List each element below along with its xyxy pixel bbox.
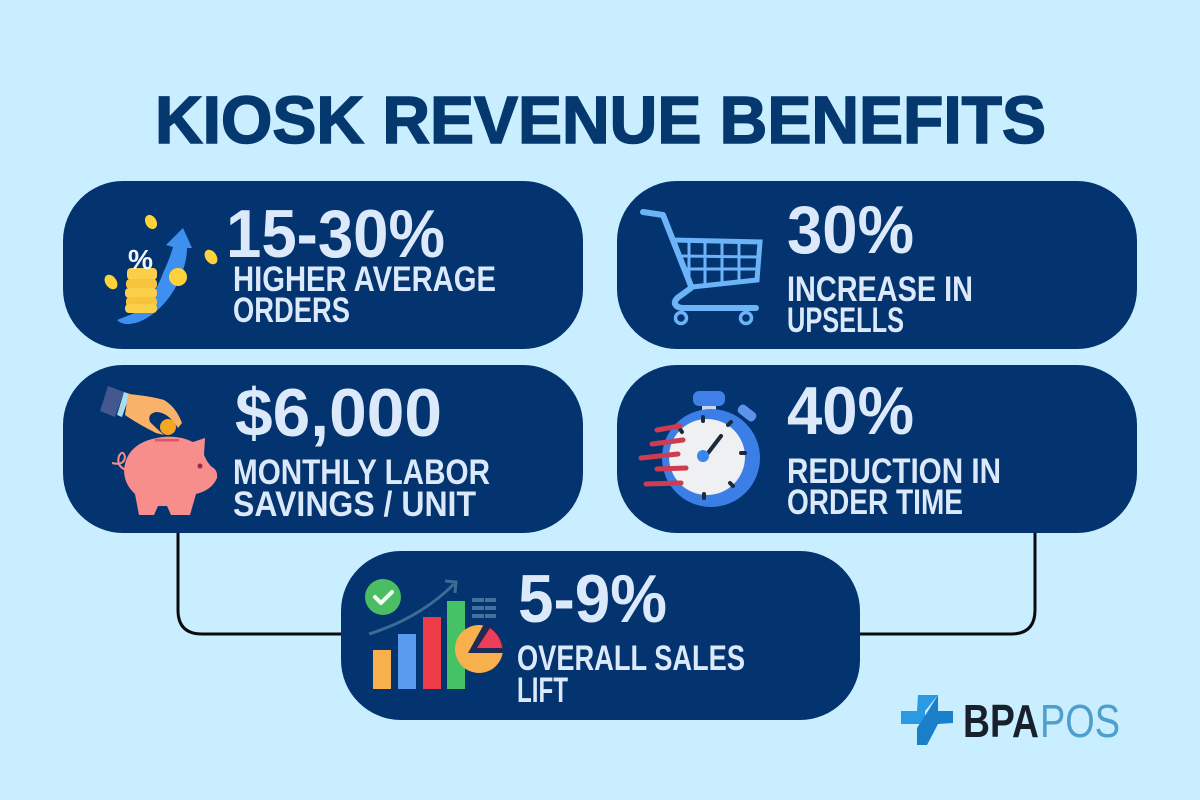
panel: reduction in order time — [617, 365, 1137, 533]
icon: piggy bank with hand and coin — [100, 386, 217, 515]
icon: coins and rising arrow — [102, 213, 220, 324]
label: overall sales lift: LIFT — [517, 671, 568, 710]
label: reduction in order time — [787, 452, 1001, 522]
label: overall sales lift: OVERALL SALES — [517, 639, 745, 678]
icon: shopping cart — [643, 212, 760, 324]
wordmark — [963, 695, 1120, 747]
connector lines — [178, 530, 1035, 634]
label: monthly labor savings / unit: MONTHLY LABOR — [233, 453, 490, 492]
icon: logo cross — [901, 695, 953, 745]
stat: 5-9%: 5-9% — [518, 561, 667, 637]
panel: higher average orders — [63, 181, 583, 349]
panel: overall sales lift — [341, 551, 860, 720]
label: reduction in order time: REDUCTION IN — [787, 452, 1001, 491]
wordmark: POS — [1040, 695, 1120, 747]
label: monthly labor savings / unit: SAVINGS / UNIT — [233, 485, 476, 524]
logo: BPA POS — [901, 695, 1120, 747]
stat: 15-30%: 15-30% — [226, 196, 445, 272]
icon: stopwatch with speed lines — [641, 391, 760, 507]
percent sign: % — [128, 244, 153, 275]
label: increase in upsells: UPSELLS — [787, 301, 904, 340]
wordmark: BPA — [963, 695, 1039, 747]
label: increase in upsells — [787, 270, 973, 340]
panel: increase in upsells — [617, 181, 1137, 349]
label: increase in upsells: INCREASE IN — [787, 270, 973, 309]
panel: monthly labor savings — [63, 365, 583, 533]
label: monthly labor savings / unit — [233, 453, 490, 524]
icon: bar chart with pie and check — [365, 579, 503, 689]
title: KIOSK REVENUE BENEFITS — [155, 83, 1046, 158]
label: overall sales lift — [517, 639, 745, 710]
label: reduction in order time: ORDER TIME — [787, 483, 963, 522]
label: higher average orders: HIGHER AVERAGE — [233, 260, 496, 299]
label: higher average orders — [233, 260, 496, 330]
stat: 40%: 40% — [787, 373, 914, 449]
stat: $6,000: $6,000 — [235, 375, 442, 451]
stat: 30%: 30% — [787, 192, 914, 268]
label: higher average orders: ORDERS — [233, 291, 350, 330]
